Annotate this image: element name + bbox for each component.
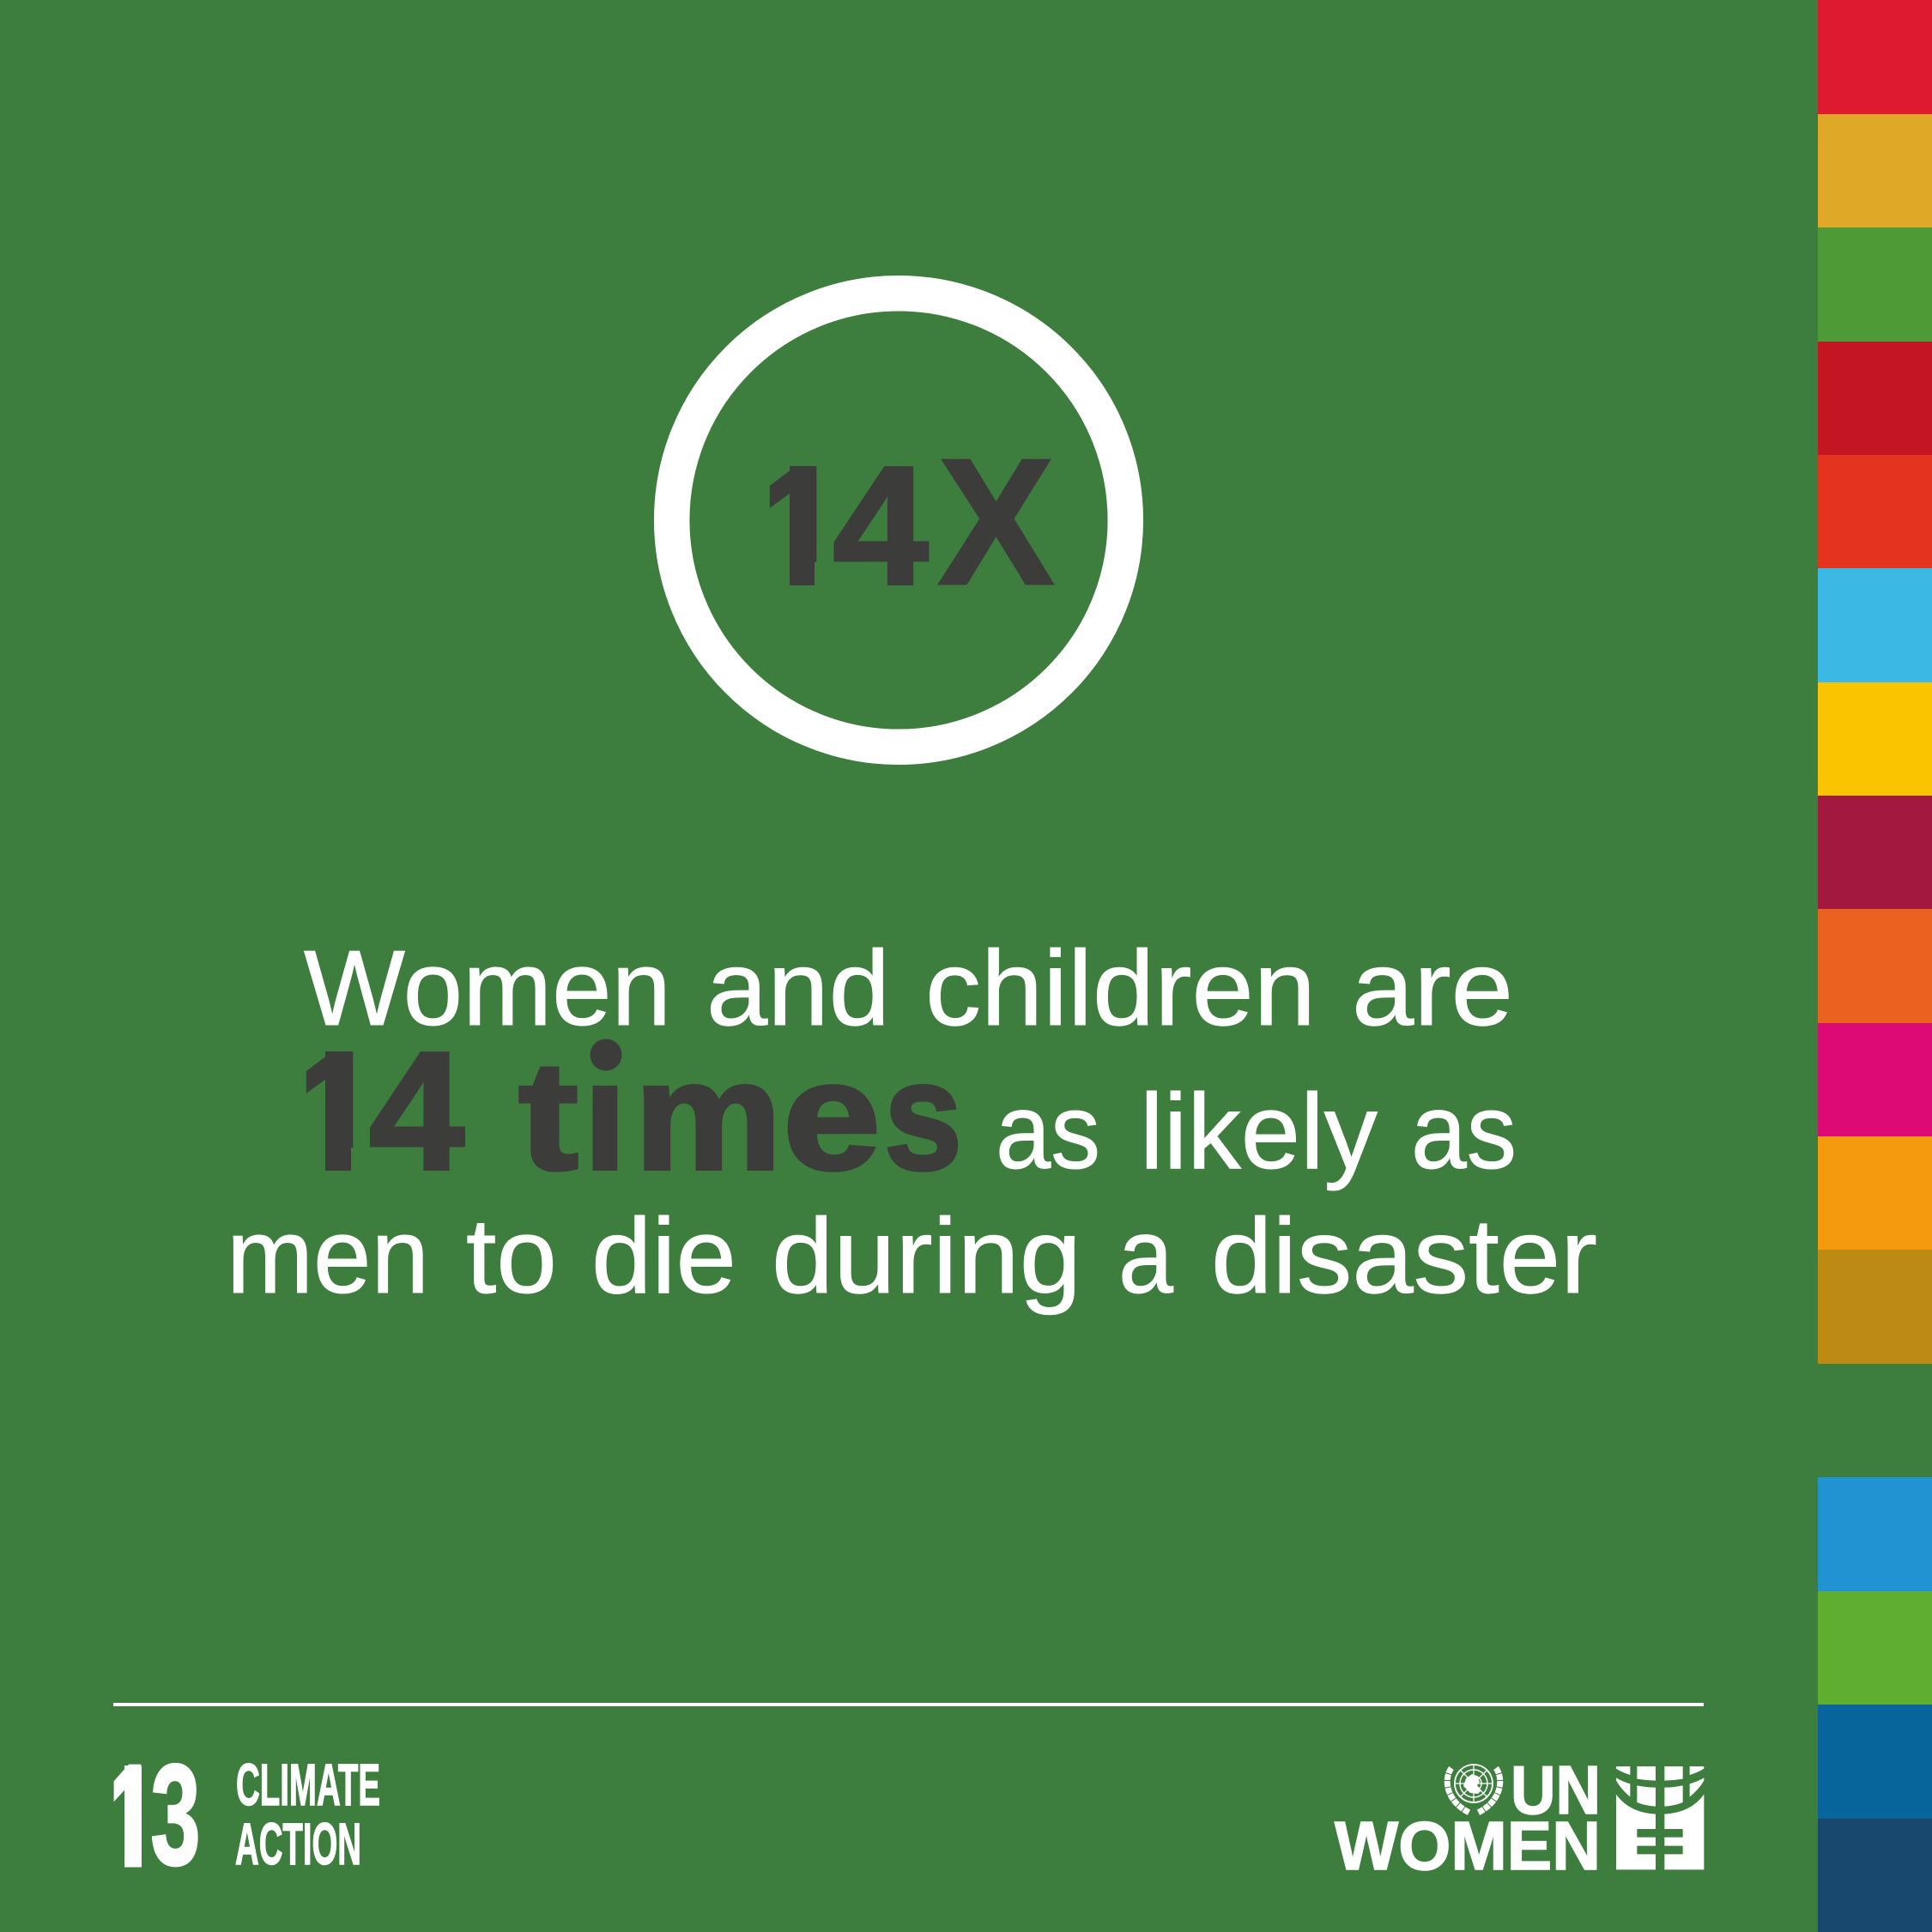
line 2: s	[884, 1030, 962, 1202]
icon: UN emblem	[1447, 1765, 1500, 1813]
line 3: to	[466, 1197, 557, 1316]
line 2: 1	[298, 1017, 379, 1205]
line 1	[304, 930, 1513, 1048]
wordmark: UN: UN	[1511, 1752, 1601, 1828]
UN Women logo	[1335, 1752, 1704, 1884]
line 1: are	[1352, 930, 1513, 1048]
line 1: children	[925, 930, 1316, 1048]
goal number: 3	[151, 1735, 201, 1895]
ring	[672, 294, 1125, 747]
line 2: 4	[369, 1017, 464, 1205]
SDG 13 climate action label	[105, 1735, 380, 1896]
line 2: likely	[1140, 1073, 1378, 1191]
goal name	[235, 1752, 380, 1877]
line 3: die	[591, 1197, 736, 1316]
line 1: Women	[304, 930, 671, 1048]
line 2: as	[1411, 1073, 1517, 1191]
line 3	[227, 1197, 1597, 1316]
line 2: e	[783, 1030, 881, 1202]
statistic: 14X: 4	[833, 432, 929, 620]
icon: ring with 14X statistic	[672, 294, 1125, 747]
goal name: ACTION	[235, 1811, 361, 1877]
line 2	[296, 1017, 1517, 1205]
SDG colour stripe column	[1818, 0, 1932, 1932]
statistic: 14X	[760, 422, 1054, 622]
goal number: 1	[110, 1736, 154, 1896]
line 1: and	[706, 930, 890, 1048]
line 3: a	[1118, 1197, 1173, 1316]
line 2: i	[584, 1030, 627, 1202]
line 2: as	[996, 1073, 1100, 1191]
goal name: CLIMATE	[236, 1752, 380, 1818]
line 3: disaster	[1211, 1197, 1597, 1316]
line 3: men	[227, 1197, 429, 1316]
line 3: during	[772, 1197, 1081, 1316]
icon: UN Women symbol	[1616, 1766, 1704, 1869]
headline text block	[227, 930, 1597, 1316]
line 2: m	[634, 1030, 782, 1202]
line 2: t	[518, 1030, 578, 1202]
statistic: 14X: 1	[761, 432, 842, 620]
statistic: 14X: X	[938, 422, 1054, 622]
wordmark: WOMEN: WOMEN	[1335, 1808, 1601, 1884]
